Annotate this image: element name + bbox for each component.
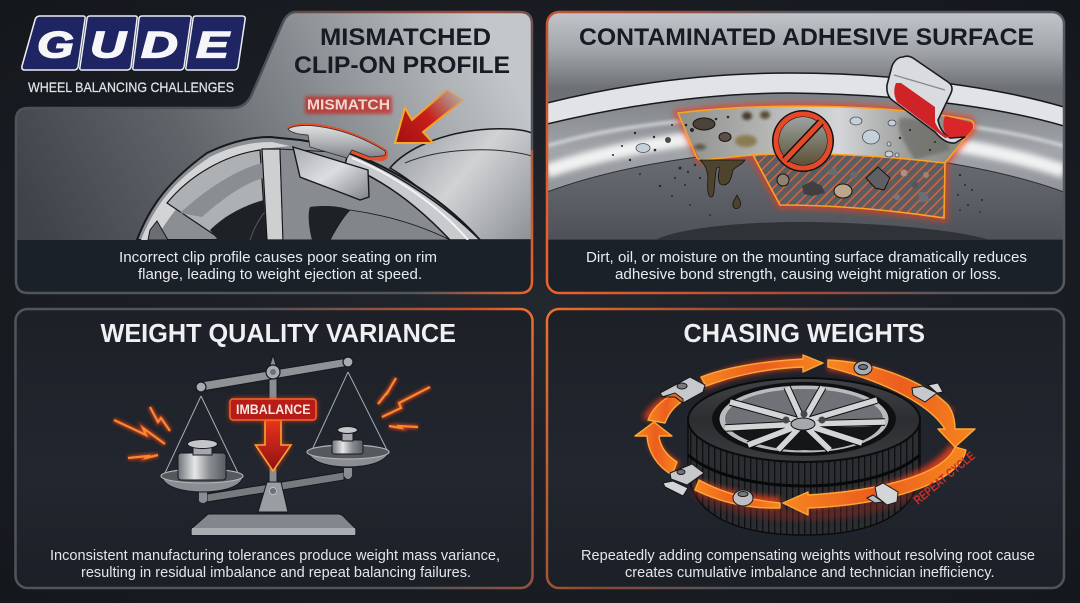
left pan and heavy weight (161, 440, 243, 492)
peeling adhesive weight (887, 56, 973, 143)
heading: contaminated adhesive surface: CONTAMINATED ADHESIVE SURFACE (579, 24, 1034, 51)
caption: weight quality variance (50, 548, 500, 581)
clip weight lower block (293, 147, 369, 200)
illustration: tire and wheel (688, 378, 920, 535)
right rim band (345, 153, 480, 240)
logo: GUDE: D (141, 24, 178, 66)
heading: mismatched clip-on profile (294, 24, 510, 79)
left wheel window (167, 150, 266, 240)
icon: lightning bolts (114, 378, 430, 458)
heading: weight quality variance: WEIGHT QUALITY VARIANCE (100, 320, 456, 348)
panel border (16, 12, 532, 293)
illustration: wheel and clip-on weight (137, 123, 532, 240)
heading: chasing weights: CHASING WEIGHTS (684, 320, 925, 348)
callout label: mismatch: MISMATCH (307, 98, 390, 114)
callout arrow: imbalance (256, 420, 291, 471)
hatched zone (753, 154, 945, 218)
panel: mismatched clip-on profile (16, 12, 532, 293)
heading: mismatched clip-on profile: CLIP-ON PROFILE (294, 52, 510, 79)
caption: chasing weights (581, 548, 1035, 581)
logo: GUDE: U (90, 24, 128, 66)
right pan and light weight (307, 426, 389, 467)
illustration: unbalanced scale (161, 355, 389, 535)
water droplets (636, 117, 899, 157)
dirt and debris (612, 111, 983, 216)
prohibition sign (772, 110, 834, 172)
panel: contaminated adhesive surface (547, 12, 1064, 293)
caption: mismatched clip-on profile: Incorrect clip profile causes poor seating on rim (119, 250, 437, 266)
heading: mismatched clip-on profile: MISMATCHED (320, 24, 491, 51)
panel: chasing weights (547, 309, 1064, 588)
caption: contaminated adhesive surface: Dirt, oil, or moisture on the mounting surface dramatically reduces (586, 250, 1027, 266)
cycle arrows (635, 355, 975, 515)
callout arrow: mismatch (395, 90, 463, 143)
icons: small weights on cycle (660, 361, 943, 506)
caption: chasing weights: creates cumulative imbalance and technician inefficiency. (625, 565, 994, 581)
logo: GUDE: G (37, 24, 74, 66)
caption: weight quality variance: resulting in residual imbalance and repeat balancing failures. (81, 565, 471, 581)
logo: GUDE: E (196, 24, 231, 66)
panel: weight quality variance (16, 309, 532, 588)
caption: weight quality variance: Inconsistent manufacturing tolerances produce weight mass variance, (50, 548, 500, 564)
caption: chasing weights: Repeatedly adding compensating weights without resolving root cause (581, 548, 1035, 564)
illustration: rim with contaminated zone (547, 56, 1064, 240)
label: repeat cycle: REPEAT CYCLE (911, 449, 978, 507)
caption: mismatched clip-on profile (16, 240, 532, 293)
caption: contaminated adhesive surface (547, 240, 1064, 293)
right wheel window (280, 148, 327, 240)
callout label: imbalance: IMBALANCE (236, 402, 310, 417)
oil drips (700, 160, 745, 209)
clip weight upper with mismatch outline (286, 123, 388, 161)
caption: contaminated adhesive surface: adhesive bond strength, causing weight migration or loss. (615, 267, 1001, 283)
callout label: imbalance (230, 399, 316, 420)
contaminated zone glow (678, 106, 973, 218)
logo: GUDE (22, 16, 245, 70)
panel border (547, 12, 1064, 293)
wheel spokes (725, 387, 885, 450)
caption: mismatched clip-on profile: flange, leading to weight ejection at speed. (138, 267, 422, 283)
subtitle: wheel balancing challenges: WHEEL BALANCING CHALLENGES (28, 79, 234, 95)
